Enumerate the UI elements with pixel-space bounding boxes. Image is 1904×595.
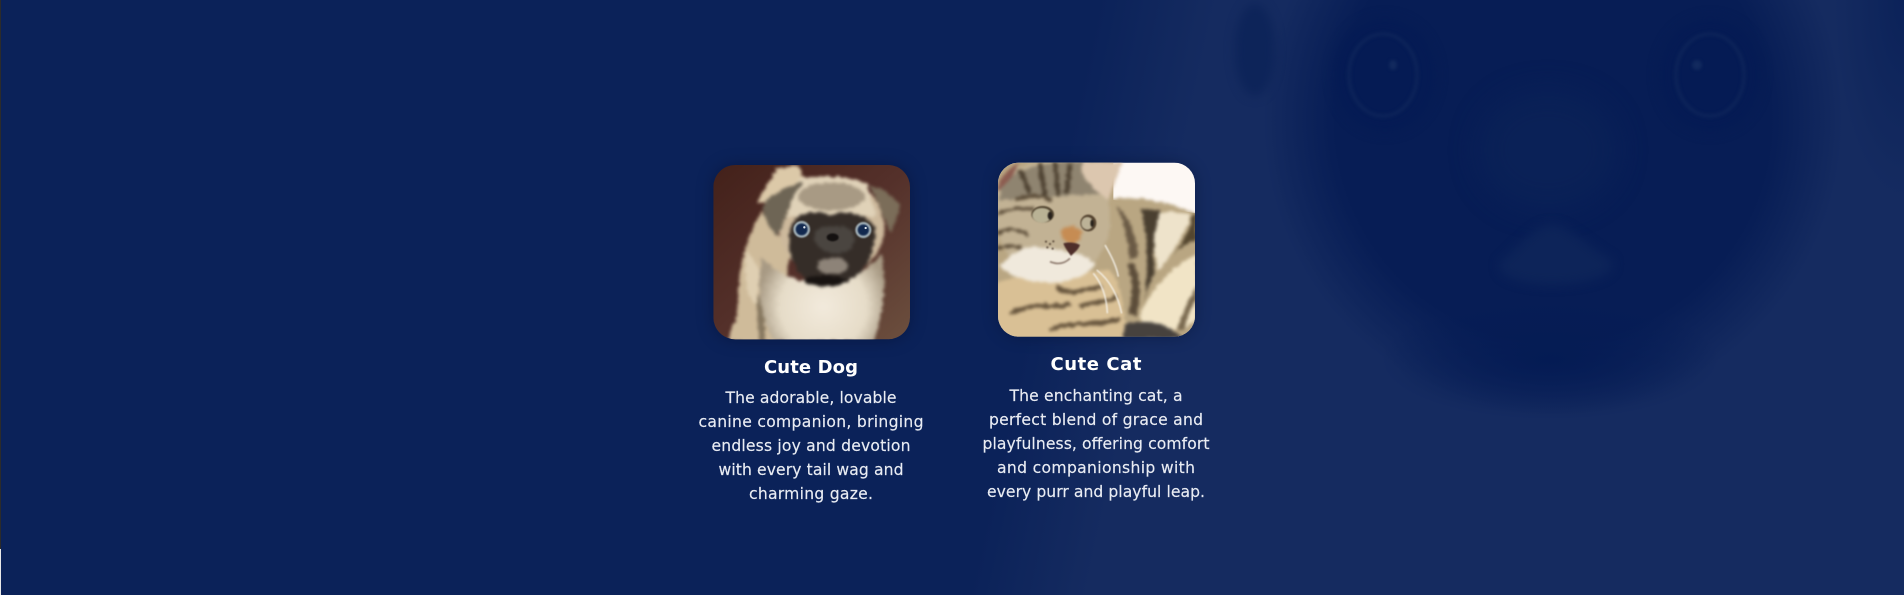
text: cat description: perfect blend of grace and (989, 411, 1203, 429)
icon: tabby cat photo (993, 160, 1197, 342)
heading: cute cat: Cute Cat (1050, 354, 1142, 375)
text: dog description: with every tail wag and (718, 461, 904, 479)
icon: pug photo (713, 165, 910, 342)
text: dog description: charming gaze. (749, 485, 873, 503)
left edge sliver (0, 0, 1, 595)
text: dog description: endless joy and devotion (712, 437, 910, 455)
text: cat description: every purr and playful leap. (987, 483, 1205, 501)
text: cat description (982, 387, 1210, 501)
text: dog description (698, 389, 924, 503)
text: cat description: playfulness, offering comfort (982, 435, 1210, 453)
text: dog description: The adorable, lovable (724, 389, 896, 407)
cat image shadow (998, 163, 1195, 337)
card: cute cat (982, 160, 1210, 501)
text: cat description: The enchanting cat, a (1008, 387, 1182, 405)
text: dog description: canine companion, bringing (698, 413, 924, 431)
card: cute dog (698, 165, 924, 503)
heading: cute dog: Cute Dog (764, 357, 858, 378)
text: cat description: and companionship with (997, 459, 1195, 477)
dog image shadow (713, 165, 910, 340)
